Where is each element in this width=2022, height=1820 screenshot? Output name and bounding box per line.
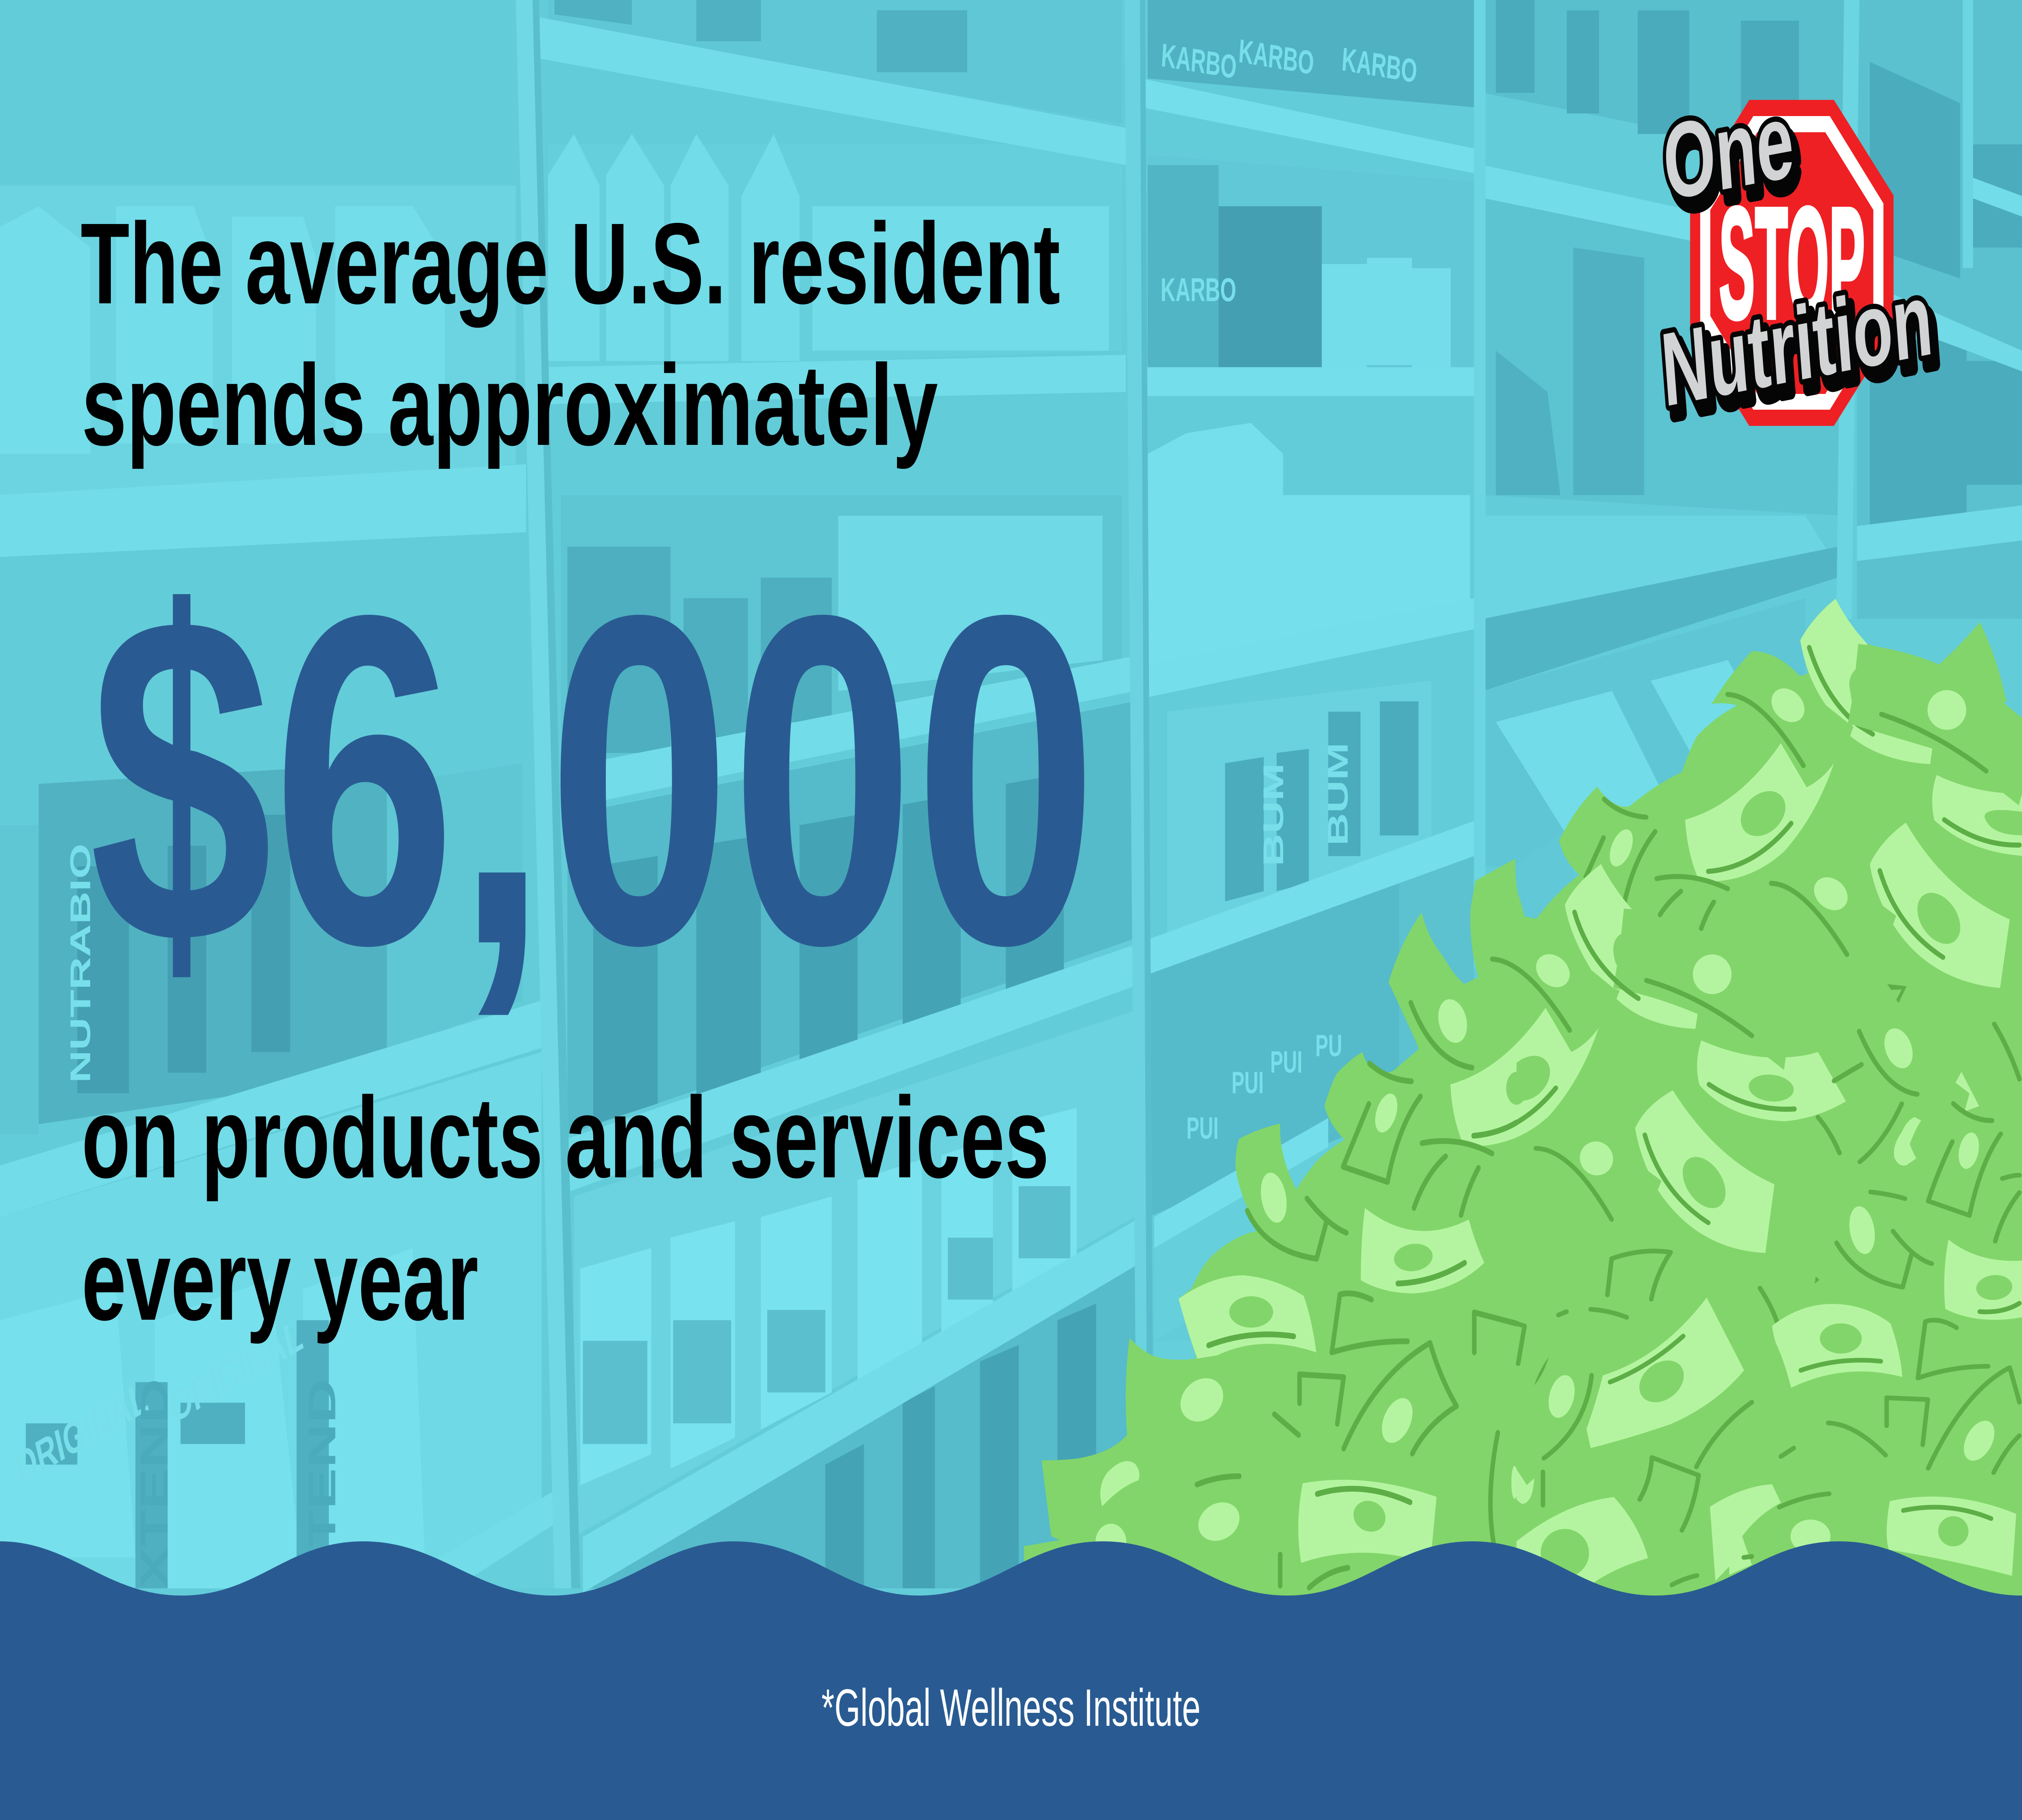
word: Nutrition: Nutrition (1662, 269, 1942, 438)
left-edge light bill (1451, 1008, 1599, 1146)
product label text seen in the photo: PU (1316, 1028, 1342, 1063)
product label text seen in the photo: KARBO (1237, 32, 1315, 82)
word: Nutrition: Nutrition (1657, 260, 1936, 429)
logo: One Stop Nutrition (1643, 81, 1971, 453)
centre light bill (1685, 743, 1834, 882)
product label text seen in the photo (11, 32, 1418, 1588)
upper right bills (1451, 599, 2022, 1146)
product label text seen in the photo: ORIGINAL (165, 1309, 307, 1433)
headline text: The average U.S. resident (80, 202, 1060, 328)
footer band (0, 1600, 2022, 1820)
second fold bill (1565, 864, 1698, 1029)
closing text: on products and services (81, 1073, 1049, 1202)
product label text seen in the photo: PUI (1187, 1111, 1218, 1145)
product label text seen in the photo: NUTRABIO (64, 844, 96, 1083)
overlapping green bill (1848, 622, 2022, 797)
wavy top edge of footer (0, 1537, 2022, 1602)
product label text seen in the photo: ORIGINAL (11, 1371, 152, 1494)
word: One: One (1659, 81, 1797, 223)
product label text seen in the photo: KARBO (1160, 36, 1238, 86)
top right light bill (1932, 775, 2022, 856)
product label text seen in the photo: BUM (1257, 763, 1289, 866)
word: One: One (1665, 89, 1802, 233)
closing text (76, 1072, 1087, 1375)
product label text seen in the photo: KARBO (1161, 272, 1236, 309)
lower right bills (1516, 1090, 2022, 1585)
product label text seen in the photo: KARBO (1341, 41, 1418, 90)
closing text: every year (81, 1216, 478, 1344)
headline text (76, 202, 1087, 506)
product label text seen in the photo: PUI (1270, 1045, 1303, 1079)
product label text seen in the photo: PUI (1231, 1065, 1264, 1100)
product label text seen in the photo: XTEND (133, 1379, 176, 1588)
stop sign (1690, 100, 1893, 426)
headline text: spends approximately (81, 341, 938, 470)
source note: *Global Wellness Institute (821, 1678, 1201, 1737)
lower left bills (1096, 993, 1527, 1587)
top light bill (1800, 599, 1932, 764)
product label text seen in the photo: XTEND (300, 1379, 344, 1588)
pile silhouette (1024, 599, 2022, 1602)
right light bill (1870, 823, 2010, 988)
lower centre light bill (1697, 1040, 1846, 1121)
product label text seen in the photo: BUM (1322, 743, 1354, 846)
money pile illustration (1011, 586, 2022, 1602)
